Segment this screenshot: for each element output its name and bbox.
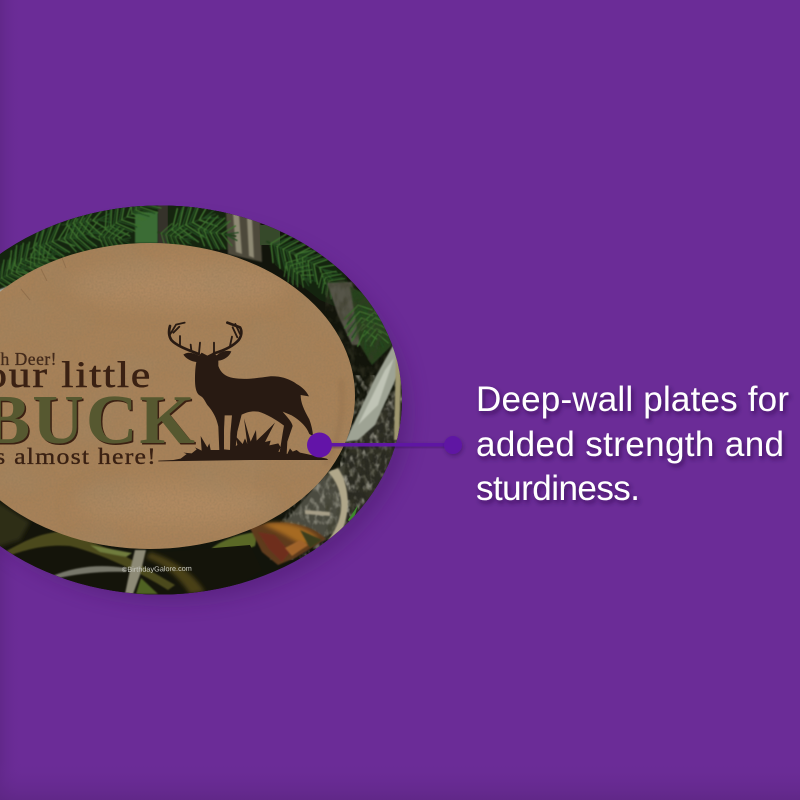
grass and ground [158, 418, 328, 461]
connector start dot [307, 432, 332, 458]
callout text: sturdiness. [476, 469, 640, 508]
left antler [169, 323, 241, 354]
leaves [212, 532, 256, 548]
paper plate [0, 206, 402, 594]
callout text [476, 380, 789, 508]
watermark: ©BirthdayGalore.com [122, 564, 192, 574]
callout text: Deep-wall plates for [476, 380, 789, 419]
right antler [214, 323, 241, 353]
plate center: kraft paper [0, 243, 355, 549]
connector line [325, 443, 453, 446]
deer body [183, 351, 313, 454]
pine needles [0, 206, 346, 300]
plate text [0, 349, 198, 470]
plate text: BUCK [0, 396, 196, 445]
callout text: added strength and [476, 425, 784, 464]
plate rim: camouflage pattern [0, 206, 402, 594]
connector end dot [444, 436, 462, 454]
forest floor [0, 545, 252, 594]
callout connector [307, 432, 462, 458]
plate drop shadow [0, 224, 408, 600]
icon: deer silhouette [158, 323, 328, 461]
